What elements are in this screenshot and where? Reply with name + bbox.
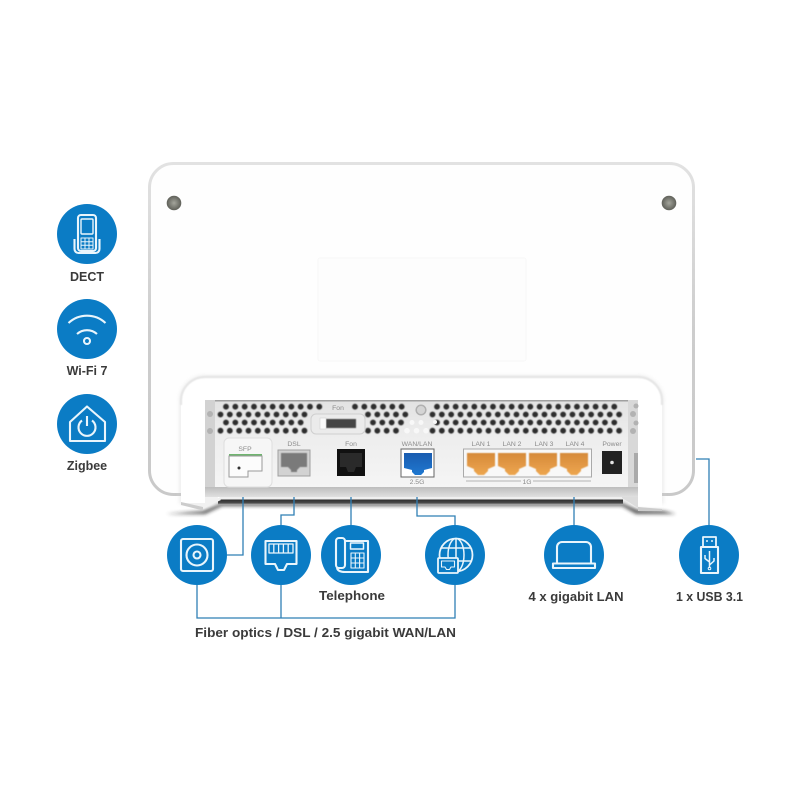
DSL port: DSL (287, 441, 301, 448)
SFP port: SFP (238, 446, 252, 453)
icon: globe with port (425, 525, 485, 585)
ventilation holes (220, 407, 626, 431)
label recess (318, 258, 526, 361)
Zigbee label: Zigbee (67, 459, 107, 473)
power LED ring (416, 405, 426, 415)
icon: DSL port (251, 525, 311, 585)
icon: Zigbee (57, 394, 117, 454)
WAN/LAN port: WAN/LAN (402, 441, 432, 448)
icon: laptop (544, 525, 604, 585)
WAN/LAN port (401, 441, 434, 486)
connectivity label: Fiber optics / DSL / 2.5 gigabit WAN/LAN (195, 626, 456, 640)
LED dots (404, 420, 437, 434)
LAN ports: LAN 1 (472, 441, 491, 448)
DECT label: DECT (70, 270, 104, 284)
side vents (207, 404, 638, 434)
rear port panel (205, 400, 638, 497)
Fon top label: Fon (332, 405, 344, 412)
power socket (602, 441, 622, 474)
LAN ports: 1G (522, 479, 532, 486)
floor shadow (166, 503, 676, 514)
Fon port (337, 441, 365, 476)
Telephone label: Telephone (319, 589, 385, 603)
LAN ports: LAN 3 (535, 441, 554, 448)
WAN/LAN port: 2.5G (410, 479, 424, 486)
router body (150, 164, 694, 494)
Fon port: Fon (345, 441, 357, 448)
screw left (167, 196, 181, 210)
icon: USB stick (679, 525, 739, 585)
router stand (166, 375, 676, 514)
icon: fiber optics (167, 525, 227, 585)
LAN ports: LAN 2 (503, 441, 522, 448)
DSL port (278, 441, 310, 476)
icon: DECT (57, 204, 117, 264)
screw right (662, 196, 676, 210)
icon: Wi-Fi (57, 299, 117, 359)
4 x gigabit LAN label: 4 x gigabit LAN (528, 590, 624, 604)
1 x USB 3.1 label: 1 x USB 3.1 (676, 590, 743, 604)
Wi-Fi 7 label: Wi-Fi 7 (67, 364, 107, 378)
SFP port (224, 438, 272, 487)
LAN ports: LAN 4 (566, 441, 585, 448)
LAN ports (464, 441, 592, 486)
icon: telephone (321, 525, 381, 585)
DECT button (311, 414, 365, 434)
power socket: Power (602, 441, 622, 448)
connector lines (197, 459, 709, 618)
